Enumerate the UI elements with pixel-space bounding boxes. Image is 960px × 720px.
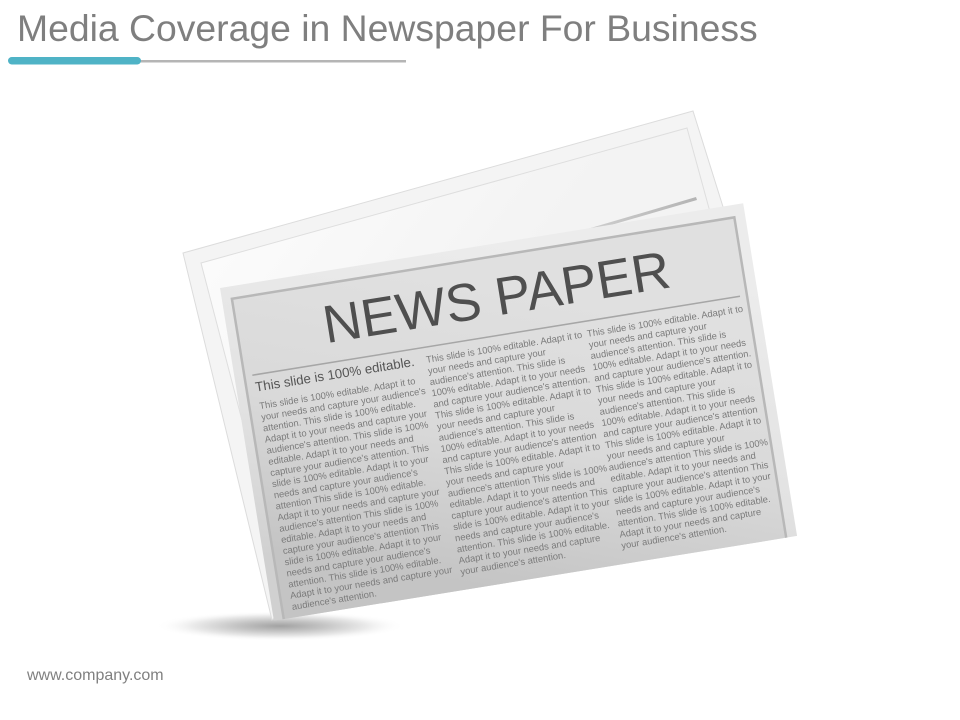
column 2 text: editable. Adapt it to your needs and bbox=[449, 476, 596, 510]
column 2 text: audience's attention. This slide is bbox=[429, 354, 566, 387]
column 1 text: Adapt it to your needs and capture your bbox=[277, 486, 440, 523]
column 2 text: audience's attention This slide is 100% bbox=[447, 462, 608, 499]
column 1 text: attention This slide is 100% editable. bbox=[275, 476, 427, 512]
column 3 text: capture your audience's attention This bbox=[611, 459, 769, 495]
column 1 text: Adapt it to your needs and capture your bbox=[264, 408, 428, 445]
column 3 text: and capture your audience's attention. bbox=[593, 347, 752, 383]
column 3 text: your needs and capture your bbox=[606, 432, 726, 462]
column 2 text: your audience's attention. bbox=[460, 549, 566, 577]
column 2 text: 100% editable. Adapt it to your needs bbox=[431, 363, 586, 398]
inner page panel bbox=[232, 217, 786, 619]
column 2 text: attention. This slide is 100% editable. bbox=[456, 519, 610, 555]
column 2 text: slide is 100% editable. Adapt it to your bbox=[452, 496, 610, 532]
column 2 text: This slide is 100% editable. Adapt it to bbox=[425, 329, 583, 365]
column 1 text: editable. Adapt it to your needs and bbox=[280, 511, 427, 545]
column 2 text: audience's attention. This slide is bbox=[438, 410, 575, 443]
newspaper illustration bbox=[183, 111, 797, 621]
column 3 text: and capture your audience's attention bbox=[602, 403, 758, 439]
column 3 text: 100% editable. Adapt it to your needs bbox=[592, 337, 747, 372]
title: Media Coverage in Newspaper For Business bbox=[17, 7, 758, 49]
column 3 text: editable. Adapt it to your needs and bbox=[610, 449, 756, 484]
column 1 text: audience's attention This slide is 100% bbox=[278, 497, 439, 534]
column 2 text: 100% editable. Adapt it to your needs bbox=[440, 418, 595, 454]
column 2 text: your needs and capture your bbox=[427, 346, 547, 376]
column 3 text: slide is 100% editable. Adapt it to your bbox=[613, 470, 771, 506]
column 1 text: Adapt it to your needs and capture your bbox=[289, 564, 453, 601]
column 1 text: attention. This slide is 100% editable. bbox=[262, 398, 416, 433]
column 1 text: slide is 100% editable. Adapt it to your bbox=[284, 531, 442, 567]
column 1 text: This slide is 100% editable. Adapt it to bbox=[258, 375, 416, 411]
masthead rule bbox=[252, 295, 740, 376]
ground shadow bbox=[155, 611, 405, 641]
column 3 text: your needs and capture your bbox=[588, 320, 707, 350]
column 3 text: audience's attention This slide is 100% bbox=[608, 436, 769, 473]
column 2 text: and capture your audience's attention. bbox=[432, 373, 591, 410]
column 3 text: your audience's attention. bbox=[620, 523, 727, 551]
column 3 text: audience's attention. This slide is bbox=[599, 384, 736, 417]
column 2 text: needs and capture your audience's bbox=[454, 509, 600, 543]
column 3 text: This slide is 100% editable. Adapt it to bbox=[604, 414, 762, 450]
title underline bbox=[8, 57, 406, 64]
column heading: This slide is 100% editable. bbox=[254, 354, 416, 395]
column 2 text: This slide is 100% editable. Adapt it to bbox=[434, 385, 592, 421]
sheet background bbox=[220, 203, 797, 621]
column 1 text: needs and capture your audience's bbox=[273, 466, 419, 500]
column 1 text: capture your audience's attention This bbox=[282, 520, 440, 556]
column 1 text: audience's attention. bbox=[291, 587, 377, 612]
column 2 text: your needs and capture your bbox=[436, 402, 556, 432]
column 1 text: slide is 100% editable. Adapt it to your bbox=[271, 453, 429, 489]
column 3 text: attention. This slide is 100% editable. bbox=[617, 493, 771, 528]
column 2 text: and capture your audience's attention bbox=[441, 429, 597, 465]
back sheet bbox=[183, 111, 724, 620]
column 3 text: Adapt it to your needs and capture bbox=[619, 506, 762, 540]
column 3 text: audience's attention. This slide is bbox=[590, 328, 727, 361]
front sheet bbox=[220, 203, 797, 621]
column 2 text: Adapt it to your needs and capture bbox=[458, 532, 601, 566]
column 1 text: editable. Adapt it to your needs and bbox=[267, 433, 414, 467]
footer website: www.company.com bbox=[26, 667, 164, 684]
column 3 text: needs and capture your audience's bbox=[615, 483, 761, 517]
column 3 text: your needs and capture your bbox=[597, 376, 717, 406]
masthead: NEWS PAPER: NEWS PAPER bbox=[319, 241, 674, 355]
column 2 text: capture your audience's attention This bbox=[450, 485, 608, 521]
column 1 text: needs and capture your audience's bbox=[286, 544, 431, 578]
column 2 text: your needs and capture your bbox=[445, 458, 565, 488]
column 3 text: This slide is 100% editable. Adapt it to bbox=[586, 303, 744, 339]
column 3 text: This slide is 100% editable. Adapt it to bbox=[595, 359, 753, 395]
column 1 text: attention. This slide is 100% editable. bbox=[287, 554, 442, 590]
column 2 text: This slide is 100% editable. Adapt it to bbox=[443, 440, 601, 476]
column 1 text: your needs and capture your audience's bbox=[260, 385, 427, 422]
column 1 text: audience's attention. This slide is 100% bbox=[266, 419, 429, 456]
column 1 text: capture your audience's attention. This bbox=[269, 442, 430, 478]
column 3 text: 100% editable. Adapt it to your needs bbox=[601, 392, 756, 428]
